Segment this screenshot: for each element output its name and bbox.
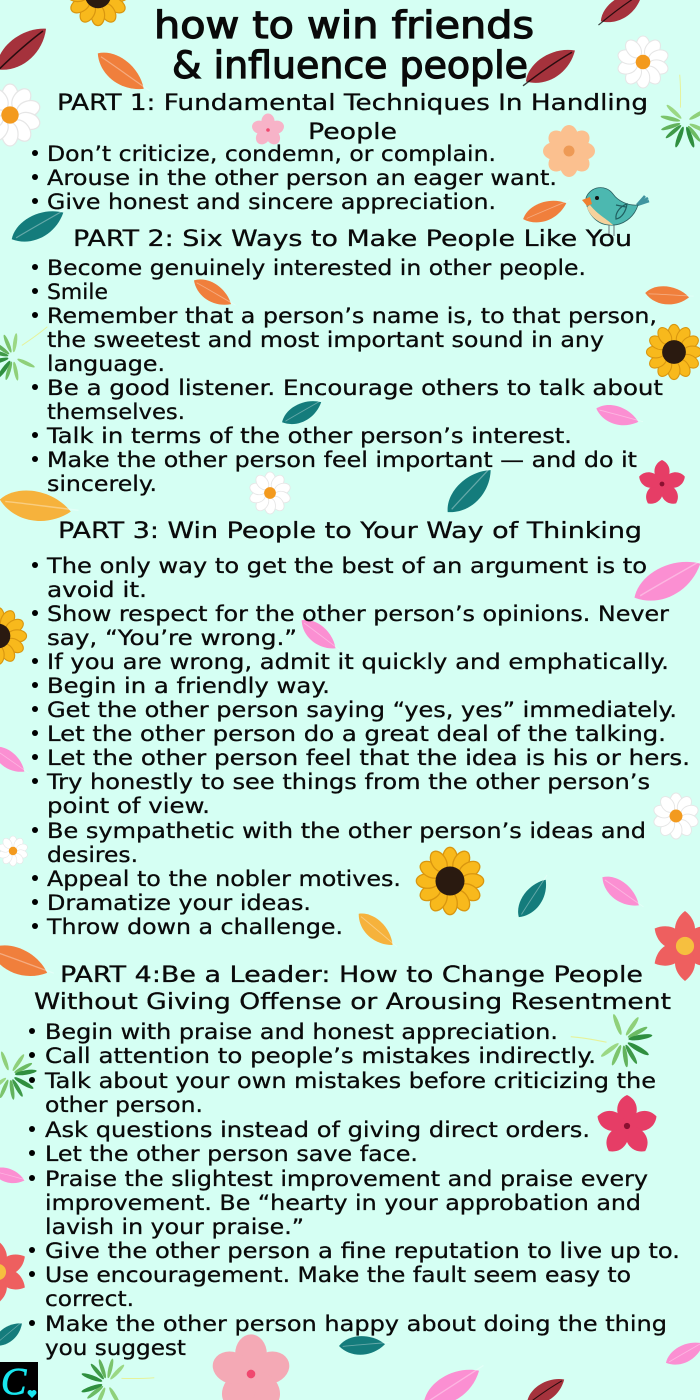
flower: sunflower right xyxy=(646,324,700,380)
leaf: pink left edge xyxy=(0,741,32,781)
heading: part 1 xyxy=(57,91,648,145)
fern: left part 2 xyxy=(0,308,62,392)
list: part 3 tips: The only way to get the best of an argument is to xyxy=(46,554,647,578)
logo badge xyxy=(0,1361,38,1400)
list: part 1 tips: Don’t criticize, condemn, or complain. xyxy=(47,142,496,166)
flower: sunflower left edge xyxy=(0,607,27,665)
list: part 2 tips: language. xyxy=(47,352,165,376)
leaf: pink bottom right xyxy=(662,1335,700,1370)
list: part 4 tips: Call attention to people’s mistakes indirectly. xyxy=(45,1044,596,1068)
list: part 4 tips: Give the other person a fine reputation to live up to. xyxy=(45,1239,680,1263)
leaf: teal large xyxy=(439,458,504,521)
leaf: maroon bottom xyxy=(519,1373,569,1400)
list: part 3 tips: Try honestly to see things from the other person’s xyxy=(46,770,650,794)
list: part 4 tips: Let the other person save face. xyxy=(45,1142,418,1166)
list: part 2 tips: Remember that a person’s name is, to that person, xyxy=(47,304,657,328)
list: part 3 tips: say, “You’re wrong.” xyxy=(47,626,297,650)
heading: part 1: People xyxy=(308,120,397,145)
list: part 1 tips: Give honest and sincere appreciation. xyxy=(47,190,496,214)
flower: large pink bottom xyxy=(208,1334,294,1400)
list: part 3 tips: If you are wrong, admit it quickly and emphatically. xyxy=(47,650,669,674)
list: part 4 tips: Ask questions instead of giving direct orders. xyxy=(45,1118,590,1142)
heading: part 4 xyxy=(34,963,671,1015)
list: part 4 tips: Praise the slightest improvement and praise every xyxy=(45,1167,648,1191)
list: part 4 tips: Make the other person happy about doing the thing xyxy=(45,1312,667,1336)
title: how to win friends xyxy=(154,4,534,47)
list: part 3 tips: Get the other person saying “yes, yes” immediately. xyxy=(47,698,677,722)
leaf: pink left part 4 xyxy=(0,1163,30,1189)
leaf: pink right xyxy=(593,400,645,433)
list: part 4 tips: Begin with praise and honest appreciation. xyxy=(45,1020,558,1044)
flower: small pink xyxy=(250,114,286,147)
list: part 2 tips: the sweetest and most important sound in any xyxy=(47,328,604,352)
flower: coral left xyxy=(0,1241,29,1303)
list: part 4 tips xyxy=(29,1020,680,1360)
list: part 4 tips: you suggest xyxy=(45,1336,186,1360)
heading: part 2: PART 2: Six Ways to Make People Like You xyxy=(73,227,632,252)
leaf: teal lower left xyxy=(0,1316,30,1351)
list: part 3 tips: Let the other person feel that the idea is his or hers. xyxy=(47,746,690,770)
list: part 4 tips: Use encouragement. Make the fault seem easy to xyxy=(45,1263,631,1287)
flower: red-pink right xyxy=(637,460,687,508)
panel: part 1 xyxy=(32,91,648,214)
leaf: teal left of part 2 xyxy=(6,201,74,249)
heading: part 4: PART 4:Be a Leader: How to Change People xyxy=(60,963,643,988)
flower: daisy left xyxy=(0,84,42,146)
list: part 4 tips: correct. xyxy=(45,1287,134,1311)
flower: daisy right xyxy=(652,793,700,839)
flower: red-pink part 4 xyxy=(594,1095,660,1157)
panel: part 2 xyxy=(32,227,663,496)
list: part 2 tips: Become genuinely interested in other people. xyxy=(47,256,586,280)
fern: bottom xyxy=(76,1350,158,1400)
panel: part 4 xyxy=(29,963,680,1360)
leaf: yellow left xyxy=(0,484,80,529)
title xyxy=(154,4,534,87)
leaf: yellow part 3 xyxy=(353,907,402,956)
list: part 3 tips: Throw down a challenge. xyxy=(46,915,343,939)
flower: daisy left small xyxy=(0,836,28,866)
flower: peach xyxy=(543,125,595,177)
leaf: pink large right xyxy=(628,549,700,610)
list: part 2 tips: Be a good listener. Encourage others to talk about xyxy=(47,376,663,400)
list: part 3 tips: Show respect for the other person’s opinions. Never xyxy=(47,602,669,626)
fern: top right xyxy=(652,71,700,153)
list: part 2 tips: Talk in terms of the other person’s interest. xyxy=(46,424,572,448)
list: part 1 tips xyxy=(32,142,557,214)
flower: daisy centre xyxy=(248,472,292,514)
list: part 1 tips: Arouse in the other person an eager want. xyxy=(47,166,557,190)
flower: daisy top right xyxy=(616,36,670,88)
fern: part 4 left xyxy=(0,1051,37,1100)
leaf: orange near title xyxy=(91,44,155,103)
flower: coral right xyxy=(650,911,700,981)
leaf: pink part 3 xyxy=(597,870,648,916)
leaf: maroon top right xyxy=(592,0,648,31)
list: part 3 tips: desires. xyxy=(47,843,138,867)
heading: part 3: PART 3: Win People to Your Way of Thinking xyxy=(58,519,642,544)
list: part 4 tips: improvement. Be “hearty in your approbation and xyxy=(45,1191,641,1215)
leaf: teal centre xyxy=(278,393,329,430)
fern: part 4 right xyxy=(571,1013,653,1068)
leaf: maroon beside title xyxy=(516,42,582,93)
heading: part 1: PART 1: Fundamental Techniques In Handling xyxy=(57,91,648,116)
flower: sunflower centre xyxy=(416,847,484,915)
list: part 3 tips: Be sympathetic with the other person’s ideas and xyxy=(47,819,646,843)
list: part 3 tips xyxy=(32,554,690,939)
list: part 4 tips: lavish in your praise.” xyxy=(45,1215,304,1239)
leaf: teal bottom centre xyxy=(339,1336,390,1355)
list: part 2 tips: Make the other person feel important — and do it xyxy=(47,448,637,472)
list: part 4 tips: Talk about your own mistakes before criticizing the xyxy=(44,1069,656,1093)
list: part 2 tips: sincerely. xyxy=(47,472,157,496)
flower: sunflower top xyxy=(67,0,129,26)
leaf: pink centre xyxy=(296,613,344,659)
leaf: orange under part 1 xyxy=(520,194,574,227)
icon: teal bird xyxy=(582,188,649,236)
list: part 3 tips: avoid it. xyxy=(47,578,147,602)
leaf: teal part 3 xyxy=(511,871,557,923)
list: part 3 tips: Appeal to the nobler motives. xyxy=(47,867,401,891)
panel: part 3 xyxy=(32,519,690,939)
leaf: maroon top left xyxy=(0,20,55,82)
leaf: orange left part 4 xyxy=(0,937,57,988)
list: part 2 tips xyxy=(32,256,663,496)
list: part 3 tips: Let the other person do a great deal of the talking. xyxy=(47,722,666,746)
list: part 3 tips: point of view. xyxy=(47,794,210,818)
leaf: orange mid part 2 xyxy=(189,273,239,315)
list: part 3 tips: Dramatize your ideas. xyxy=(47,891,311,915)
leaf: pink bottom xyxy=(417,1358,492,1400)
title: & influence people xyxy=(172,44,528,87)
list: part 2 tips: Smile xyxy=(47,280,108,304)
list: part 2 tips: themselves. xyxy=(47,400,185,424)
list: part 3 tips: Begin in a friendly way. xyxy=(47,674,330,698)
heading: part 4: Without Giving Offense or Arousing Resentment xyxy=(34,990,671,1015)
leaf: orange right part 2 xyxy=(644,284,694,308)
list: part 4 tips: other person. xyxy=(45,1093,203,1117)
